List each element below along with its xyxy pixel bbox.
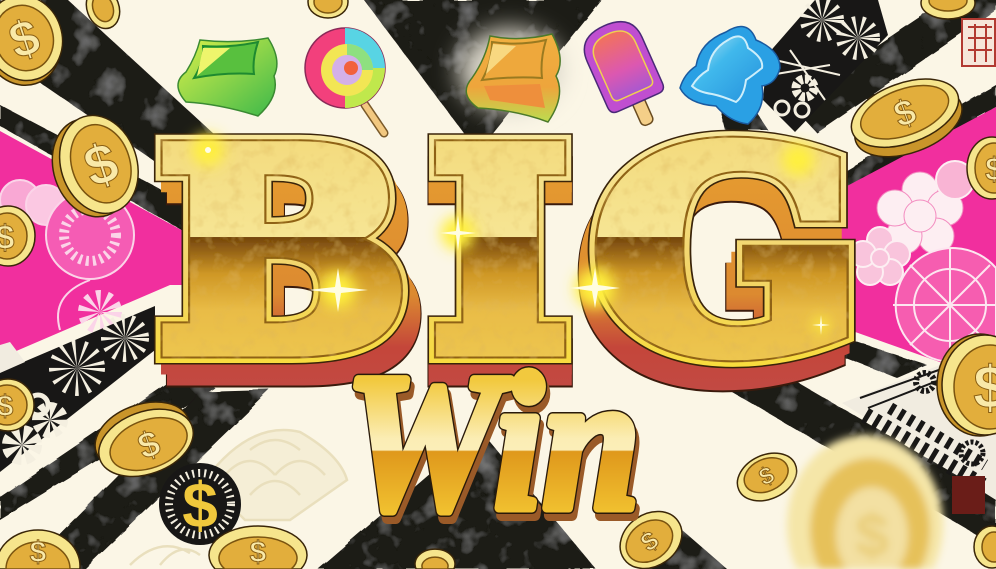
- coin bottom left: [0, 530, 80, 569]
- letter G: G: [584, 118, 852, 437]
- sparkle on G bottom right: [812, 315, 830, 335]
- coin lower left: [86, 389, 203, 489]
- coin lower left: $: [132, 422, 165, 467]
- patterned band top right: [763, 0, 888, 132]
- letter G: G: [594, 94, 862, 413]
- coin lower right edge: [937, 334, 996, 436]
- letter I: I: [432, 94, 568, 413]
- candy: lollipop: [305, 28, 385, 133]
- dollar medallion: $: [182, 469, 218, 541]
- blurred foreground coin: [787, 435, 943, 569]
- letter B: B: [170, 116, 420, 435]
- sparkle on G top right: [782, 144, 814, 176]
- smoke behind amber candy: [458, 28, 562, 112]
- title: Win: Win: [348, 341, 643, 558]
- title: Win: Win: [345, 334, 640, 551]
- letter I: I: [432, 94, 568, 413]
- title: BIG: [158, 94, 862, 437]
- letter I: I: [432, 94, 568, 413]
- pink panel left: [0, 131, 185, 358]
- candy: popsicle: [577, 14, 675, 137]
- pink panel right: [815, 107, 996, 382]
- patterned band bottom right: [842, 365, 996, 500]
- coin bottom right corner: [974, 526, 996, 568]
- blossom small: [850, 227, 910, 285]
- coin upper left: $: [76, 129, 126, 199]
- coin bottom: [209, 526, 307, 569]
- cream patch left: [0, 342, 25, 373]
- blurred foreground coin: $: [855, 502, 889, 569]
- candy: blue star: [680, 27, 780, 124]
- coin lower right: [730, 444, 804, 510]
- letter I: I: [432, 117, 568, 436]
- letter G: G: [594, 94, 862, 413]
- coin lower right: $: [755, 461, 779, 492]
- letter G: G: [594, 94, 862, 413]
- sparkles: [192, 134, 830, 335]
- blossom large: [877, 172, 963, 254]
- letter B: B: [158, 94, 408, 413]
- letter G: G: [584, 117, 852, 436]
- coin lower left edge: [0, 379, 34, 431]
- coin bottom: $: [250, 536, 267, 569]
- letter B: B: [158, 94, 408, 413]
- seal bottom right: [952, 476, 985, 514]
- coin top left: $: [2, 8, 46, 70]
- letter I: I: [432, 94, 568, 413]
- coin bottom left: $: [30, 536, 47, 569]
- sparkle on B centre: [308, 268, 368, 312]
- wave pattern bottom left: [130, 430, 347, 565]
- patterned band left: [0, 306, 155, 472]
- seal top right: [962, 19, 995, 66]
- coin top left: [0, 0, 75, 95]
- coin top right: [921, 0, 975, 19]
- coin top: [81, 0, 125, 33]
- letter B: B: [164, 105, 414, 424]
- coin bottom right small: $: [635, 524, 664, 558]
- title: Win: Win: [345, 334, 640, 551]
- letter B: B: [158, 94, 408, 413]
- letter G: G: [594, 94, 862, 413]
- coin right edge: [967, 137, 996, 199]
- candy: amber jelly: [466, 34, 560, 122]
- letter G: G: [588, 106, 856, 425]
- letter B: B: [170, 117, 420, 436]
- lattice circle: [893, 248, 996, 362]
- sparkle on I left: [440, 215, 476, 251]
- coin left edge: [0, 206, 35, 266]
- sparkle on G left: [570, 268, 620, 308]
- flower pattern left: [0, 180, 134, 330]
- coin top centre: [308, 0, 348, 18]
- coin upper left: [40, 105, 151, 227]
- letter I: I: [432, 105, 568, 424]
- letter I: I: [432, 116, 568, 435]
- candy: green jelly: [178, 38, 277, 116]
- coin bottom right small: [609, 500, 693, 569]
- coin upper right: [842, 66, 971, 170]
- dollar medallion: [159, 463, 241, 545]
- coin bottom centre: [415, 549, 455, 569]
- sparkle on B top: [192, 134, 224, 166]
- letter B: B: [158, 94, 408, 413]
- coin upper right: $: [888, 90, 921, 135]
- blossom upper right: [936, 161, 974, 199]
